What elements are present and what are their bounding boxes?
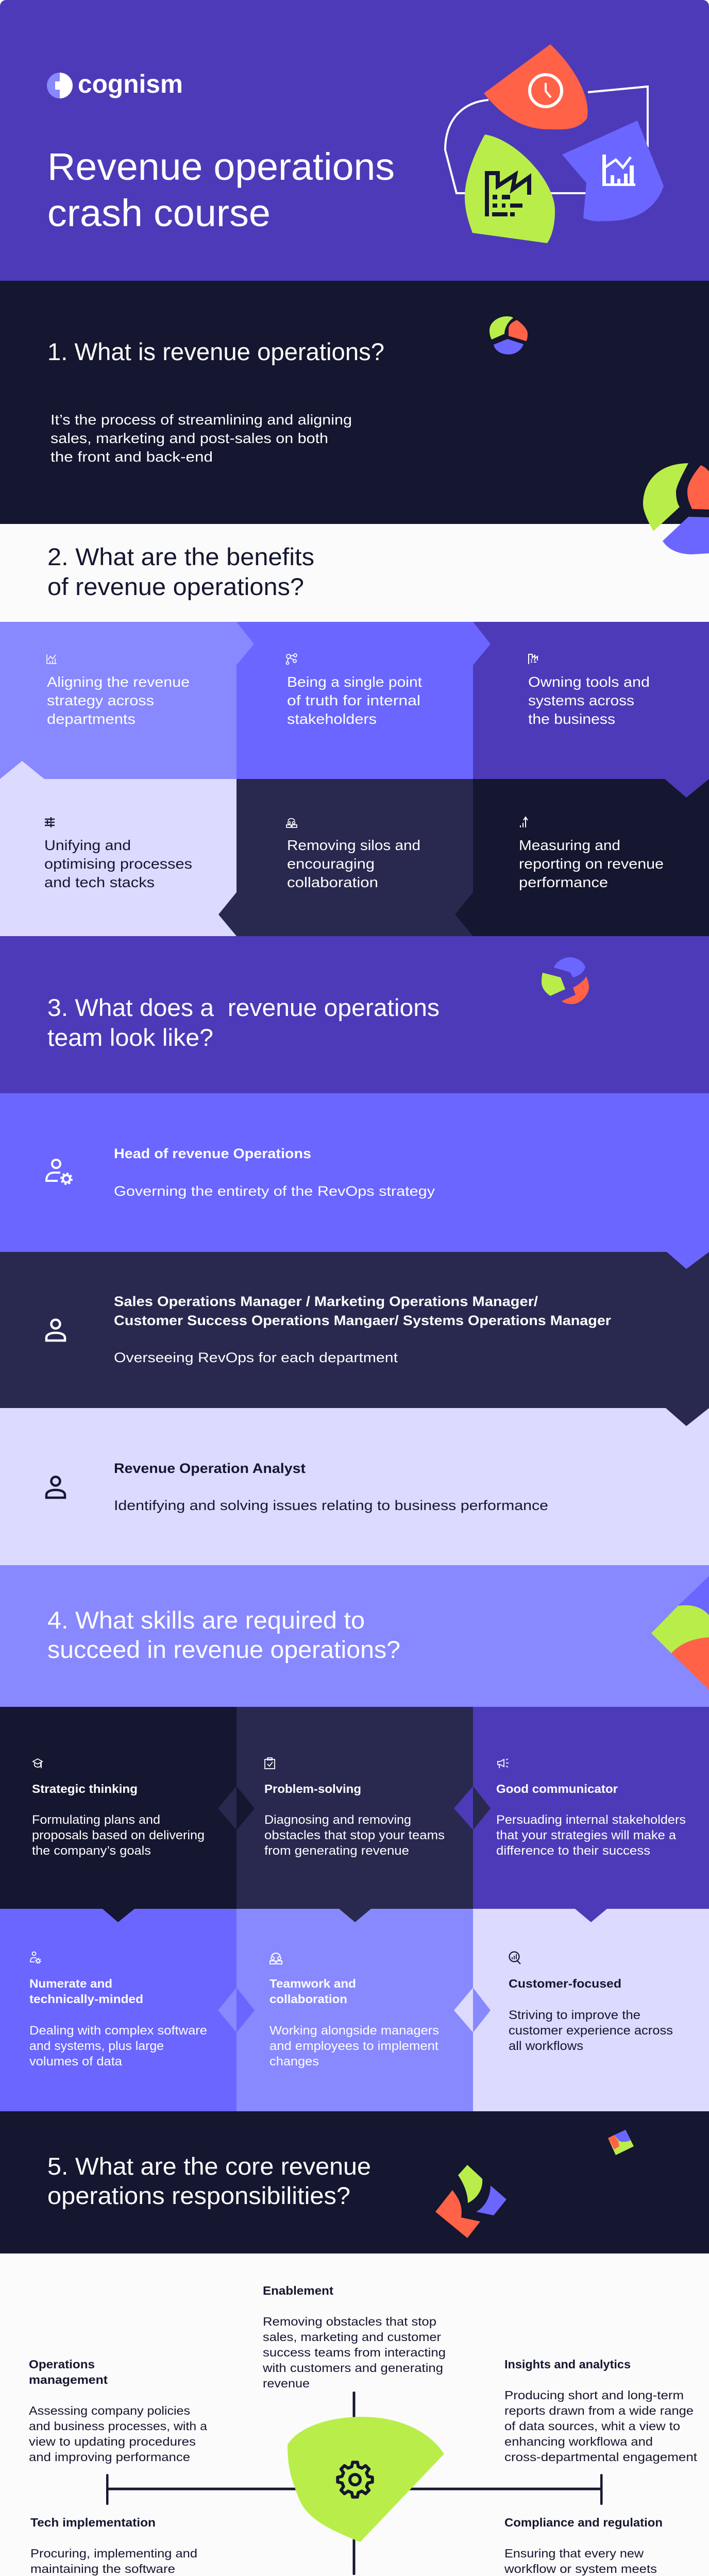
- icon: large fragments: [435, 2165, 507, 2238]
- skill: good communicator: Good communicator: [496, 1782, 618, 1795]
- skill: teamwork: Working alongside managers: [269, 2024, 439, 2038]
- icon: central gear shape: [288, 2417, 444, 2542]
- panel: section 2 heading: [0, 524, 709, 622]
- skill: good communicator: that your strategies will make a: [496, 1828, 677, 1842]
- responsibility: insights and analytics: reports drawn from a wide range: [504, 2404, 694, 2417]
- benefit: single point of truth: of truth for internal: [287, 692, 420, 708]
- skill: numerate: and systems, plus large: [29, 2039, 164, 2053]
- responsibility: compliance and regulation: [504, 2516, 663, 2576]
- skill: numerate: Numerate and: [29, 1977, 112, 1990]
- icon: kite shape: [651, 1576, 709, 1690]
- skill: problem-solving: obstacles that stop your teams: [264, 1828, 445, 1842]
- title: [47, 145, 395, 234]
- role title: Revenue Operation Analyst: [114, 1461, 306, 1476]
- benefit: single point of truth: [286, 654, 422, 727]
- skill: numerate: Dealing with complex software: [29, 2024, 207, 2038]
- responsibility: enablement: sales, marketing and customer: [263, 2330, 441, 2344]
- icon: small pie: [489, 316, 528, 354]
- icon: person: [46, 1477, 65, 1498]
- diagram: connector lines: [106, 2392, 603, 2575]
- skill: customer-focused: customer experience across: [509, 2024, 673, 2038]
- panel: benefits grid: [0, 622, 709, 936]
- role description: Governing the entirety of the RevOps strategy: [114, 1183, 435, 1199]
- benefit: measuring: Measuring and: [519, 837, 620, 853]
- heading: 2. What are the benefits: [47, 543, 314, 570]
- heading: [47, 994, 440, 1051]
- role title: [114, 1294, 612, 1328]
- panel: section 1 what is revenue operations: [0, 281, 709, 524]
- panel: section 3 heading: [0, 936, 709, 1093]
- skill: teamwork: Teamwork and: [269, 1977, 356, 1990]
- panel: role department operations managers: [0, 1252, 709, 1408]
- skill: numerate: technically-minded: [29, 1992, 143, 2006]
- responsibility: tech implementation: Tech implementation: [30, 2516, 156, 2529]
- body text: [50, 412, 352, 465]
- responsibility: enablement: with customers and generating: [262, 2361, 443, 2375]
- responsibility: operations management: [29, 2358, 207, 2464]
- responsibility: enablement: success teams from interacting: [263, 2346, 446, 2359]
- responsibility: insights and analytics: [504, 2358, 698, 2464]
- role description: Overseeing RevOps for each department: [114, 1350, 398, 1365]
- illustration: connected shapes: [445, 44, 664, 243]
- responsibility: compliance and regulation: workflow or system meets: [504, 2562, 657, 2575]
- benefit: removing silos: encouraging: [287, 856, 375, 872]
- heading: [47, 543, 314, 600]
- skill: strategic thinking: Strategic thinking: [32, 1782, 138, 1795]
- heading: 5. What are the core revenue: [47, 2153, 371, 2180]
- icon: person with gear: [46, 1160, 72, 1184]
- logo: cognism: [78, 70, 183, 98]
- skill: problem-solving: Diagnosing and removing: [264, 1813, 411, 1827]
- skill: strategic thinking: the company’s goals: [32, 1844, 151, 1858]
- responsibility: compliance and regulation: Ensuring that every new: [504, 2547, 644, 2560]
- skill: customer-focused: Striving to improve the: [509, 2008, 640, 2022]
- benefit: owning tools: systems across: [528, 692, 634, 708]
- responsibility: enablement: Removing obstacles that stop: [263, 2315, 436, 2328]
- responsibility: operations management: and business processes, with a: [29, 2419, 207, 2433]
- benefit: measuring: [519, 817, 664, 890]
- benefit: single point of truth: Being a single point: [287, 674, 422, 690]
- icon: small diamond: [608, 2130, 634, 2155]
- benefit: removing silos: Removing silos and: [287, 837, 420, 853]
- heading: [47, 1606, 400, 1663]
- benefit: aligning: strategy across: [47, 692, 154, 708]
- skill: numerate: [29, 1952, 207, 2069]
- benefit: owning tools: the business: [528, 711, 615, 727]
- skill: problem-solving: from generating revenue: [264, 1844, 409, 1858]
- responsibility: operations management: management: [29, 2373, 108, 2386]
- responsibility: enablement: Enablement: [263, 2284, 333, 2297]
- benefit: measuring: reporting on revenue: [519, 856, 664, 872]
- responsibility: tech implementation: maintaining the software: [30, 2562, 175, 2575]
- skill: good communicator: Persuading internal stakeholders: [496, 1813, 686, 1827]
- skill: problem-solving: Problem-solving: [264, 1782, 361, 1795]
- skill: problem-solving: [264, 1758, 445, 1858]
- responsibility: insights and analytics: Insights and analytics: [504, 2358, 631, 2371]
- benefit: unifying: [44, 817, 192, 890]
- body text: the front and back-end: [50, 449, 213, 465]
- heading: operations responsibilities?: [47, 2182, 350, 2209]
- panel: skills grid: [0, 1707, 709, 2111]
- skill: customer-focused: [509, 1952, 673, 2053]
- heading: 3. What does a revenue operations: [47, 994, 440, 1021]
- benefit: unifying: optimising processes: [44, 856, 192, 872]
- benefit: removing silos: [286, 819, 420, 890]
- skill: strategic thinking: [32, 1759, 205, 1858]
- responsibility: insights and analytics: Producing short and long-term: [504, 2388, 684, 2402]
- benefit: single point of truth: stakeholders: [287, 711, 377, 727]
- skill: customer-focused: all workflows: [509, 2039, 583, 2053]
- skill: strategic thinking: proposals based on delivering: [32, 1828, 205, 1842]
- title: crash course: [47, 192, 271, 234]
- benefit: aligning: Aligning the revenue: [47, 674, 190, 690]
- skill: customer-focused: Customer-focused: [509, 1977, 621, 1990]
- panel: section 5 heading: [0, 2111, 709, 2253]
- benefit: removing silos: collaboration: [287, 874, 378, 890]
- responsibility: enablement: revenue: [263, 2377, 310, 2390]
- icon: pie fragments: [542, 957, 589, 1004]
- responsibility: insights and analytics: cross-departmental engagement: [504, 2450, 698, 2464]
- responsibility: tech implementation: [30, 2516, 204, 2576]
- benefit: unifying: Unifying and: [44, 837, 131, 853]
- panel: role revenue operation analyst: [0, 1408, 709, 1565]
- panel: section 5 responsibilities: [0, 2253, 709, 2576]
- skill: teamwork: changes: [269, 2055, 319, 2069]
- heading: 4. What skills are required to: [47, 1606, 365, 1634]
- icon: large pie: [643, 463, 709, 554]
- skill: teamwork: and employees to implement: [269, 2039, 438, 2053]
- icon: person: [46, 1320, 65, 1341]
- heading: team look like?: [47, 1024, 213, 1051]
- responsibility: insights and analytics: of data sources, whit a view to: [504, 2419, 680, 2433]
- body text: It’s the process of streamlining and aligning: [50, 412, 352, 428]
- benefit: owning tools: [528, 654, 650, 727]
- responsibility: operations management: Operations: [29, 2358, 95, 2371]
- responsibility: enablement: [262, 2284, 446, 2390]
- responsibility: insights and analytics: enhancing workflowa and: [504, 2435, 653, 2448]
- skill: good communicator: difference to their success: [496, 1844, 650, 1858]
- responsibility: operations management: Assessing company policies: [29, 2404, 190, 2417]
- benefit: measuring: performance: [519, 874, 608, 890]
- role title: Customer Success Operations Mangaer/ Systems Operations Manager: [114, 1313, 612, 1328]
- benefit: aligning: departments: [47, 711, 136, 727]
- skill: strategic thinking: Formulating plans and: [32, 1813, 160, 1827]
- role title: Sales Operations Manager / Marketing Operations Manager/: [114, 1294, 538, 1309]
- skill: numerate: volumes of data: [29, 2055, 123, 2069]
- responsibility: tech implementation: Procuring, implementing and: [30, 2547, 197, 2560]
- benefit: owning tools: Owning tools and: [528, 674, 650, 690]
- heading: succeed in revenue operations?: [47, 1636, 400, 1663]
- panel: hero: [0, 0, 709, 281]
- heading: [47, 2153, 371, 2209]
- heading: of revenue operations?: [47, 573, 304, 600]
- role description: Identifying and solving issues relating to business performance: [114, 1498, 548, 1513]
- benefit: unifying: and tech stacks: [44, 874, 155, 890]
- skill: teamwork: collaboration: [269, 1992, 347, 2006]
- skill: teamwork: [269, 1953, 439, 2069]
- responsibility: operations management: view to updating procedures: [29, 2435, 196, 2448]
- body text: sales, marketing and post-sales on both: [50, 430, 328, 446]
- panel: section 4 heading: [0, 1565, 709, 1707]
- responsibility: operations management: and improving performance: [29, 2450, 190, 2464]
- skill: good communicator: [496, 1759, 686, 1858]
- responsibility: compliance and regulation: Compliance and regulation: [504, 2516, 663, 2529]
- heading: 1. What is revenue operations?: [47, 338, 384, 365]
- panel: role head of revenue operations: [0, 1093, 709, 1252]
- role title: Head of revenue Operations: [114, 1146, 311, 1161]
- title: Revenue operations: [47, 145, 395, 188]
- benefit: aligning: [47, 654, 190, 727]
